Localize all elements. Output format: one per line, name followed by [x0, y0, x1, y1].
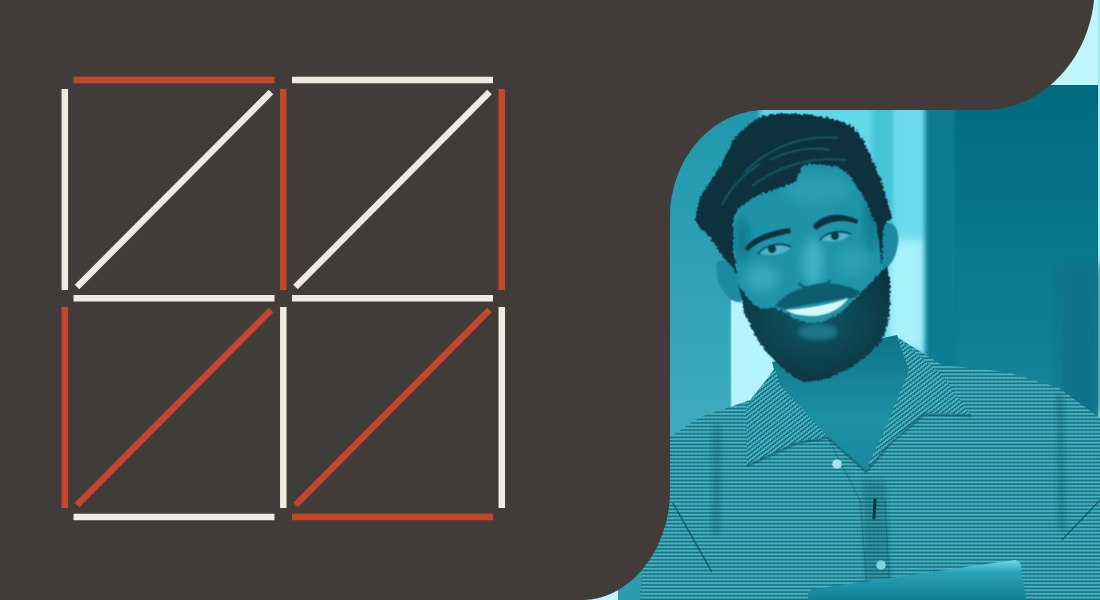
- background: office wall: [580, 0, 1100, 600]
- ear: right: [880, 223, 898, 272]
- nose: [799, 280, 830, 289]
- lower lip patch: [798, 324, 838, 340]
- shirt fold shading: [712, 392, 1066, 600]
- button: upper: [832, 459, 842, 469]
- button: lower: [876, 560, 886, 570]
- cell: bottom right: [292, 307, 502, 517]
- shirt: [640, 337, 1100, 600]
- grid motif: [65, 80, 502, 517]
- eye: left: [758, 244, 791, 255]
- cell: top left: [65, 80, 283, 298]
- face: [733, 163, 889, 352]
- face shading: [736, 176, 878, 291]
- buttonhole: [874, 500, 875, 518]
- collar: right: [866, 337, 971, 470]
- eyebrow: right: [813, 215, 858, 230]
- placket lines: [828, 438, 890, 600]
- smile: [786, 298, 848, 316]
- cell: top right: [292, 80, 502, 298]
- sleeve creases: [673, 500, 1100, 572]
- eye: right: [820, 232, 851, 242]
- collar edge shadows: [747, 414, 971, 472]
- hair: [695, 114, 892, 273]
- cell: bottom left: [65, 307, 283, 517]
- neck: [772, 335, 910, 472]
- mustache: [775, 283, 861, 309]
- tablet: [808, 560, 1026, 600]
- eyebrow: left: [745, 228, 791, 251]
- collar: left: [746, 368, 828, 465]
- photo panel: teal portrait: [580, 0, 1100, 600]
- beard: [738, 267, 890, 382]
- ear: left: [716, 260, 742, 302]
- hair highlights: [722, 137, 846, 205]
